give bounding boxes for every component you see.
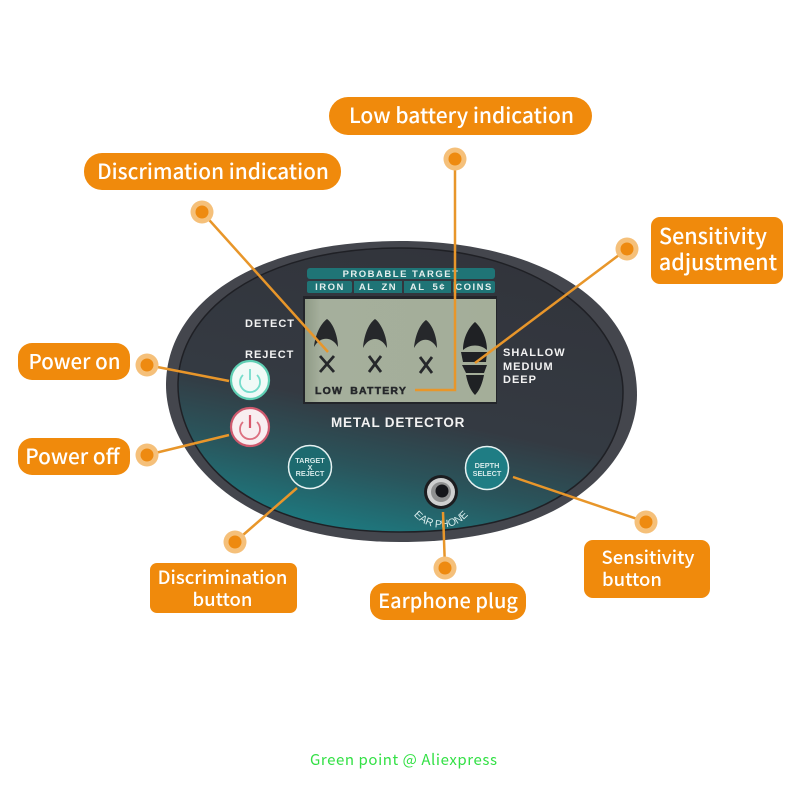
ear phone label: EAR PHONE	[414, 510, 468, 528]
callout line: power on	[147, 365, 229, 381]
label: sensitivity adjustment	[651, 217, 783, 284]
label: sensitivity button	[584, 540, 710, 598]
callout line: power off	[147, 435, 229, 455]
label: low battery indication	[329, 97, 592, 135]
callout line: discrimination indication	[202, 212, 328, 352]
callout line: sensitivity button	[513, 477, 646, 522]
callout line: low battery	[415, 159, 455, 390]
depth select button: SELECT	[473, 469, 502, 478]
target reject button	[288, 446, 332, 488]
header: probable target	[307, 268, 495, 280]
label: sensitivity adjustment: adjustment	[659, 246, 778, 277]
product labels: SHALLOW	[503, 347, 566, 359]
label: power on: Power on	[28, 345, 121, 375]
dot: sensitivity button	[634, 510, 658, 534]
callout line: discrimination button	[235, 488, 297, 542]
watermark: Green point @ Aliexpress	[310, 749, 497, 770]
target reject button: TARGET	[295, 456, 325, 465]
target reject button: REJECT	[296, 469, 325, 478]
device body	[166, 241, 637, 542]
header: probable target: PROBABLE TARGET	[343, 269, 459, 280]
power off button	[231, 408, 269, 446]
low battery text: LOW BATTERY	[315, 385, 407, 397]
label: discrimination button: Discrimination	[158, 564, 287, 590]
label: sensitivity button: button	[602, 566, 662, 592]
product labels: MEDIUM	[503, 361, 554, 373]
header: target categories: IRON	[315, 282, 345, 293]
header: target categories: AL ZN	[359, 282, 397, 293]
earphone jack	[424, 475, 458, 509]
X marks	[320, 356, 432, 373]
label: discrimination button: button	[193, 586, 252, 612]
dot: discrimination button	[224, 530, 246, 554]
dot: earphone plug	[434, 556, 456, 580]
label: sensitivity adjustment: Sensitivity	[659, 220, 767, 251]
label: power on	[18, 343, 130, 380]
label: discrimination button	[150, 563, 297, 613]
product labels: METAL DETECTOR	[331, 415, 465, 430]
sensitivity scale	[461, 322, 487, 395]
dot: power on	[136, 354, 158, 376]
label: sensitivity button: Sensitivity	[602, 544, 694, 570]
callout line: earphone plug	[443, 512, 445, 568]
label: discrimination indication: Discrimation indication	[97, 155, 329, 185]
dot: low battery	[444, 148, 466, 170]
product labels	[245, 318, 566, 430]
depth select button	[466, 446, 508, 490]
product labels: DEEP	[503, 374, 537, 386]
label: low battery indication: Low battery indication	[349, 100, 574, 130]
discrimination arcs	[314, 319, 437, 348]
power on button	[231, 361, 269, 399]
LCD display	[303, 296, 497, 404]
callout line: sensitivity adjustment	[475, 249, 627, 363]
depth select button: DEPTH	[475, 461, 499, 470]
target reject button: X	[308, 463, 313, 472]
label: earphone plug: Earphone plug	[378, 585, 518, 614]
device face	[178, 248, 623, 532]
dot: power off	[136, 444, 158, 466]
label: power off: Power off	[25, 440, 121, 470]
header: target categories	[307, 281, 495, 293]
product labels: REJECT	[245, 349, 294, 361]
product labels: DETECT	[245, 318, 295, 330]
header: target categories: AL 5¢	[410, 282, 446, 293]
dot: sensitivity adjustment	[616, 238, 638, 260]
dot: discrimination indication	[190, 200, 214, 224]
label: power off	[18, 438, 130, 475]
header: target categories: COINS	[455, 282, 493, 293]
